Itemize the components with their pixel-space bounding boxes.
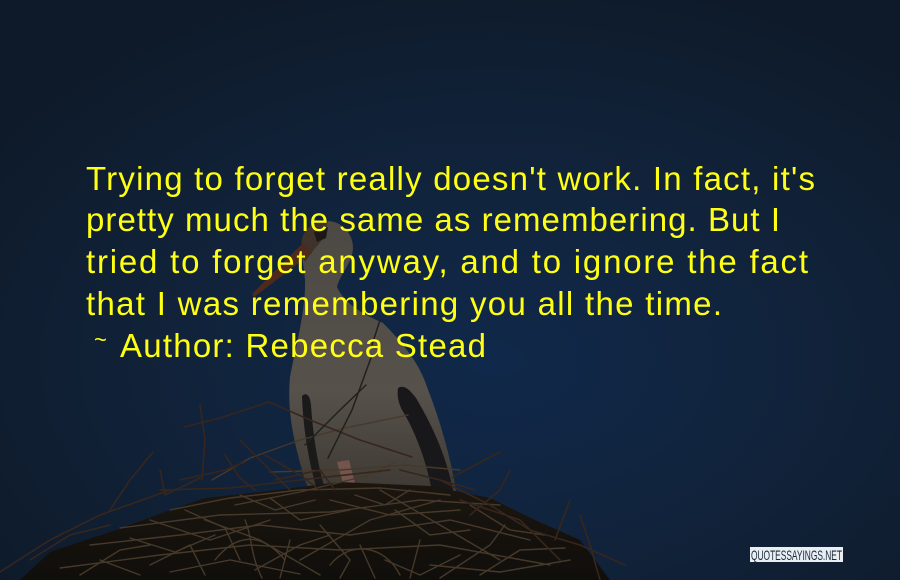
quote line 2: pretty much the same as remembering. But I bbox=[86, 201, 780, 238]
stork body bbox=[289, 221, 458, 530]
watermark background bbox=[750, 547, 843, 562]
illustration: stork standing on nest bbox=[0, 221, 625, 580]
tilde: ~ bbox=[94, 327, 107, 352]
stork eye bbox=[314, 227, 328, 242]
watermark: quotessayings.net bbox=[750, 547, 843, 563]
stork legs bbox=[337, 460, 417, 510]
author attribution bbox=[94, 327, 486, 364]
watermark text: QUOTESSAYINGS.NET bbox=[751, 547, 842, 563]
stork beak bbox=[252, 243, 312, 297]
quote line 4: that I was remembering you all the time. bbox=[86, 285, 722, 322]
nest mass bbox=[20, 482, 610, 580]
stork right wing feathers bbox=[398, 387, 453, 515]
thin dark twigs over the stork bbox=[305, 320, 380, 458]
stork head shading bbox=[302, 221, 328, 262]
nest twigs, light bbox=[60, 415, 570, 578]
quote line 3: tried to forget anyway, and to ignore the fact bbox=[86, 243, 808, 280]
quote line 1: Trying to forget really doesn't work. In fact, it's bbox=[86, 160, 815, 197]
author name: Author: Rebecca Stead bbox=[120, 327, 486, 364]
nest twigs, dark reddish bbox=[0, 402, 625, 580]
quote text bbox=[86, 160, 815, 322]
nest bbox=[0, 320, 625, 580]
stork left wing feathers bbox=[302, 394, 328, 500]
